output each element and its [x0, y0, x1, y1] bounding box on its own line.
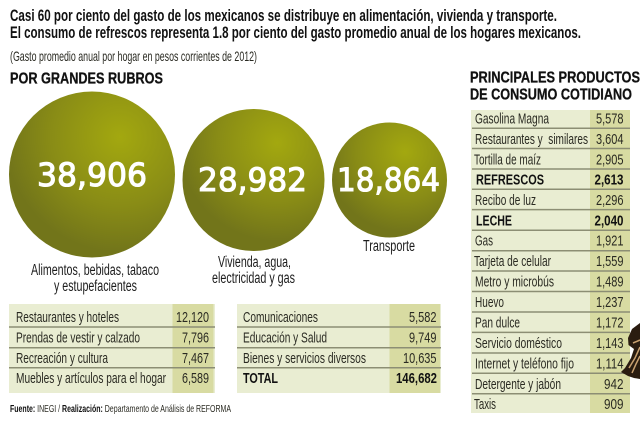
heading: por grandes rubros: POR GRANDES RUBROS — [10, 70, 163, 88]
table: productos de consumo cotidiano: 2,040 — [594, 214, 624, 230]
table: productos de consumo cotidiano: 1,921 — [596, 232, 624, 250]
label: alimentos: y estupefacientes — [54, 278, 137, 295]
table: productos de consumo cotidiano: LECHE — [476, 214, 512, 230]
table: productos de consumo cotidiano: Huevo — [475, 294, 504, 311]
bubble: transporte 18,864 — [332, 122, 447, 238]
label: transporte: Transporte — [363, 238, 415, 255]
bubble: alimentos 38,906: 38,906 — [37, 156, 147, 194]
table: productos de consumo cotidiano: Tortilla de maíz — [474, 152, 541, 168]
table: rubros left: 6,589 — [182, 370, 209, 387]
heading: principales productos — [470, 70, 640, 104]
table: productos de consumo cotidiano: Gasolina Magna — [475, 110, 549, 128]
table: rubros left: 7,467 — [182, 350, 209, 367]
table: productos de consumo cotidiano: 909 — [604, 396, 624, 413]
table: rubros right: Comunicaciones — [243, 309, 318, 326]
table: rubros right: Bienes y servicios diversos — [243, 350, 366, 367]
table: rubros right: 9,749 — [409, 330, 436, 346]
label: vivienda: electricidad y gas — [212, 270, 295, 287]
table: productos de consumo cotidiano: 1,172 — [596, 314, 624, 332]
table: productos de consumo cotidiano: 942 — [604, 376, 624, 393]
label: alimentos: Alimentos, bebidas, tabaco — [31, 262, 159, 279]
table: rubros right: TOTAL — [243, 371, 278, 387]
table: productos de consumo cotidiano: Tarjeta de celular — [474, 253, 551, 270]
table: productos de consumo cotidiano: Restaurantes y similares — [475, 131, 588, 148]
label: vivienda — [212, 254, 295, 287]
table: productos de consumo cotidiano: 1,237 — [596, 294, 624, 311]
title: main headline — [10, 7, 581, 42]
icon: partial food image at right edge — [621, 323, 640, 379]
table: rubros left — [9, 304, 215, 393]
table: rubros left: 12,120 — [176, 309, 209, 326]
table: productos de consumo cotidiano: Pan dulce — [475, 314, 520, 332]
table: rubros right: 146,682 — [396, 371, 437, 387]
table: rubros left: Restaurantes y hoteles — [16, 309, 119, 326]
table: productos de consumo cotidiano: Detergente y jabón — [475, 376, 561, 393]
table: rubros left: Muebles y artículos para el hogar — [16, 370, 166, 387]
table: productos de consumo cotidiano: 1,114 — [596, 356, 624, 372]
table: productos de consumo cotidiano: 3,604 — [596, 131, 624, 148]
table: productos de consumo cotidiano: Taxis — [474, 396, 496, 413]
table: productos de consumo cotidiano: Metro y microbús — [475, 274, 554, 290]
table: productos de consumo cotidiano: 1,489 — [596, 274, 624, 290]
table: productos de consumo cotidiano: 5,578 — [596, 110, 624, 128]
source note: Fuente: INEGI / Realización: Departamento de Análisis de REFORMA — [10, 403, 231, 415]
table: productos de consumo cotidiano: 2,296 — [596, 192, 624, 209]
table: productos de consumo cotidiano — [471, 110, 630, 413]
table: rubros left: 7,796 — [182, 330, 209, 346]
table: rubros right: Educación y Salud — [243, 330, 327, 346]
table: productos de consumo cotidiano: Internet y teléfono fijo — [475, 356, 574, 372]
table: rubros right: 10,635 — [403, 350, 436, 367]
bubble: vivienda 28,982: 28,982 — [198, 161, 307, 199]
label: alimentos — [31, 262, 159, 295]
table: productos de consumo cotidiano: 1,143 — [596, 335, 624, 352]
bubble: alimentos 38,906 — [9, 92, 175, 258]
bubble: transporte 18,864: 18,864 — [337, 161, 440, 199]
table: rubros left: Recreación y cultura — [16, 350, 108, 367]
table: productos de consumo cotidiano: 2,905 — [596, 152, 624, 168]
table: rubros right: 5,582 — [409, 309, 436, 326]
table: rubros left: Prendas de vestir y calzado — [16, 330, 140, 346]
table: productos de consumo cotidiano: Servicio doméstico — [475, 335, 562, 352]
subtitle: units note: (Gasto promedio anual por hogar en pesos corrientes de 2012) — [10, 48, 257, 64]
table: productos de consumo cotidiano: Recibo de luz — [475, 192, 536, 209]
table: productos de consumo cotidiano: 2,613 — [594, 172, 624, 188]
table: rubros right — [237, 304, 441, 393]
table: productos de consumo cotidiano: REFRESCOS — [476, 172, 544, 188]
label: vivienda: Vivienda, agua, — [218, 254, 291, 271]
table: productos de consumo cotidiano: 1,559 — [596, 253, 624, 270]
table: productos de consumo cotidiano: Gas — [475, 232, 493, 250]
bubble: vivienda 28,982 — [182, 109, 324, 251]
